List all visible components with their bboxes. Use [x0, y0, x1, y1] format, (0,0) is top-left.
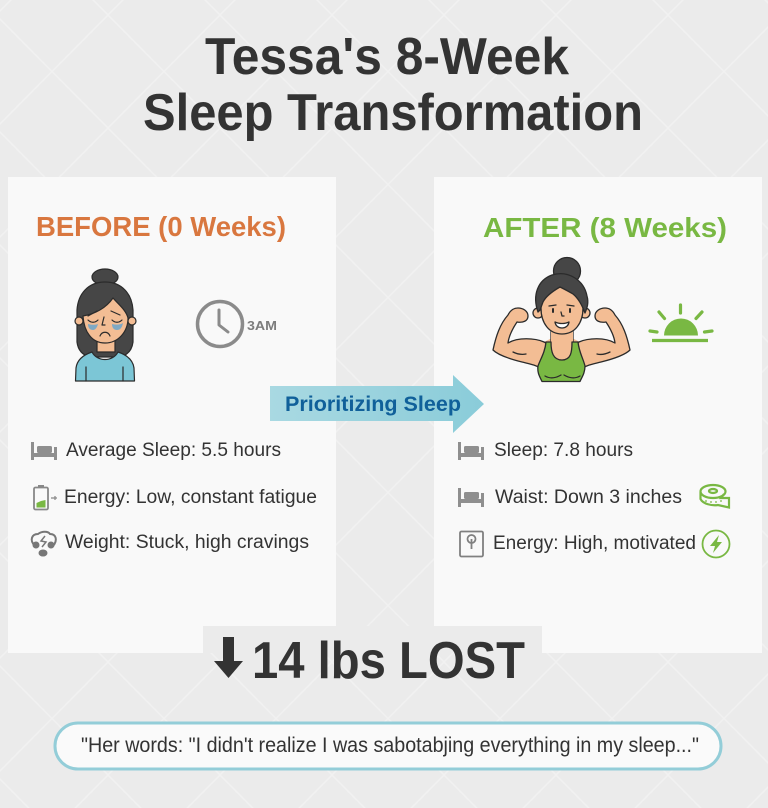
icon: clock 3AM: 3AM	[247, 318, 277, 333]
panel: before	[8, 177, 336, 653]
icon: lightning bolt	[702, 530, 730, 558]
row: energy low: Energy: Low, constant fatigue	[64, 487, 317, 508]
icon: bed	[458, 488, 484, 507]
icon: clock 3AM	[198, 302, 277, 346]
heading: before: BEFORE (0 Weeks)	[36, 211, 286, 242]
icon: sad woman	[75, 269, 136, 381]
row: waist: Waist: Down 3 inches	[495, 487, 682, 508]
quote: "Her words: "I didn't realize I was sabotabjing everything in my sleep..."	[81, 734, 699, 757]
row: weight stuck: Weight: Stuck, high cravings	[65, 532, 309, 553]
icon: sunrise	[650, 305, 712, 340]
row: waist	[458, 485, 729, 508]
icon: scale	[460, 532, 483, 556]
band behind result	[203, 626, 542, 653]
arrow: prioritizing sleep	[270, 375, 484, 433]
quote	[55, 723, 721, 769]
sub: left arm	[493, 308, 550, 368]
arrow: prioritizing sleep: Prioritizing Sleep	[285, 393, 461, 416]
sub: green top	[538, 342, 585, 382]
heading: after: AFTER (8 Weeks)	[483, 212, 727, 243]
row: sleep: Sleep: 7.8 hours	[494, 440, 633, 461]
row: energy high	[460, 530, 730, 558]
row: average sleep: Average Sleep: 5.5 hours	[66, 440, 281, 461]
icon: bed	[458, 442, 484, 460]
title	[143, 28, 643, 142]
title: Tessa's 8-Week	[205, 28, 569, 86]
icon: low battery	[34, 485, 57, 510]
sub: right arm	[573, 308, 630, 368]
row: energy high: Energy: High, motivated	[493, 533, 696, 554]
result: 14 lbs lost: 14 lbs LOST	[252, 632, 525, 690]
icon: flexing woman	[493, 258, 630, 382]
icon: down arrow	[214, 637, 243, 678]
icon: bed	[31, 442, 57, 460]
panel: after	[434, 177, 762, 653]
icon: measuring tape	[700, 485, 729, 508]
icon: cravings head	[32, 532, 56, 556]
title: Sleep Transformation	[143, 84, 643, 142]
